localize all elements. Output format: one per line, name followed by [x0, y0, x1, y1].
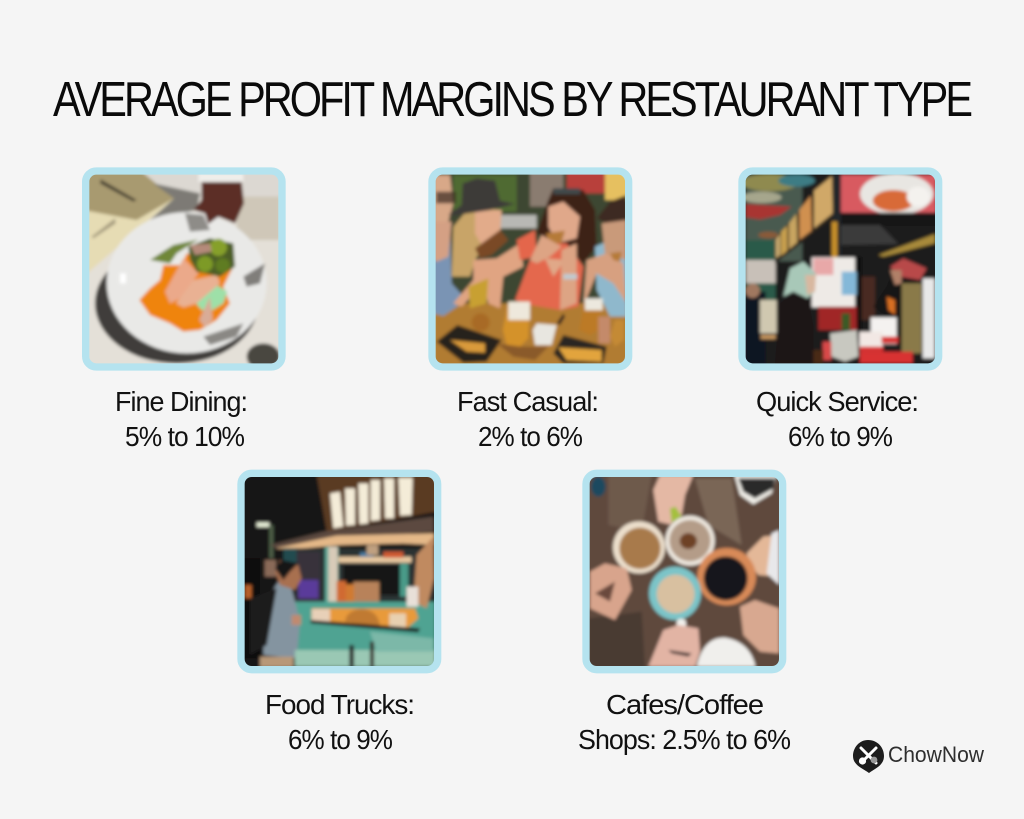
photo frame	[586, 473, 783, 670]
panel: fine dining	[83, 170, 283, 452]
photo frame	[241, 473, 438, 670]
photo: counter service restaurant	[740, 170, 940, 367]
photo: plated salmon	[89, 174, 278, 364]
icon: pin with crossed fork and spoon	[853, 740, 884, 773]
label: cafes and coffee shops: Cafes/Coffee	[606, 689, 763, 720]
panel: food trucks	[238, 472, 438, 755]
logo: ChowNow	[853, 740, 984, 773]
label: fast casual: Fast Casual:	[457, 386, 598, 417]
panel: fast casual	[430, 170, 630, 452]
logo wordmark: ChowNow	[888, 742, 984, 767]
photo frame	[86, 171, 282, 367]
label: fine dining: Fine Dining:	[115, 386, 247, 417]
label: fine dining: 5% to 10%	[125, 421, 244, 452]
label: food trucks: 6% to 9%	[288, 724, 392, 755]
label: quick service: Quick Service:	[756, 386, 918, 417]
label: quick service: 6% to 9%	[788, 421, 892, 452]
photo: friends eating burgers	[430, 170, 630, 367]
photo: coffee cups on wood table	[590, 477, 779, 666]
infographic canvas	[53, 82, 984, 773]
photo frame	[742, 171, 939, 367]
photo frame	[432, 171, 629, 367]
label: fast casual: 2% to 6%	[478, 421, 582, 452]
panel: cafes and coffee shops	[578, 472, 790, 755]
label: cafes and coffee shops: Shops: 2.5% to 6%	[578, 724, 790, 755]
photo: waffle food truck at night	[244, 477, 434, 666]
panel: quick service	[740, 170, 940, 452]
label: food trucks: Food Trucks:	[265, 689, 414, 720]
